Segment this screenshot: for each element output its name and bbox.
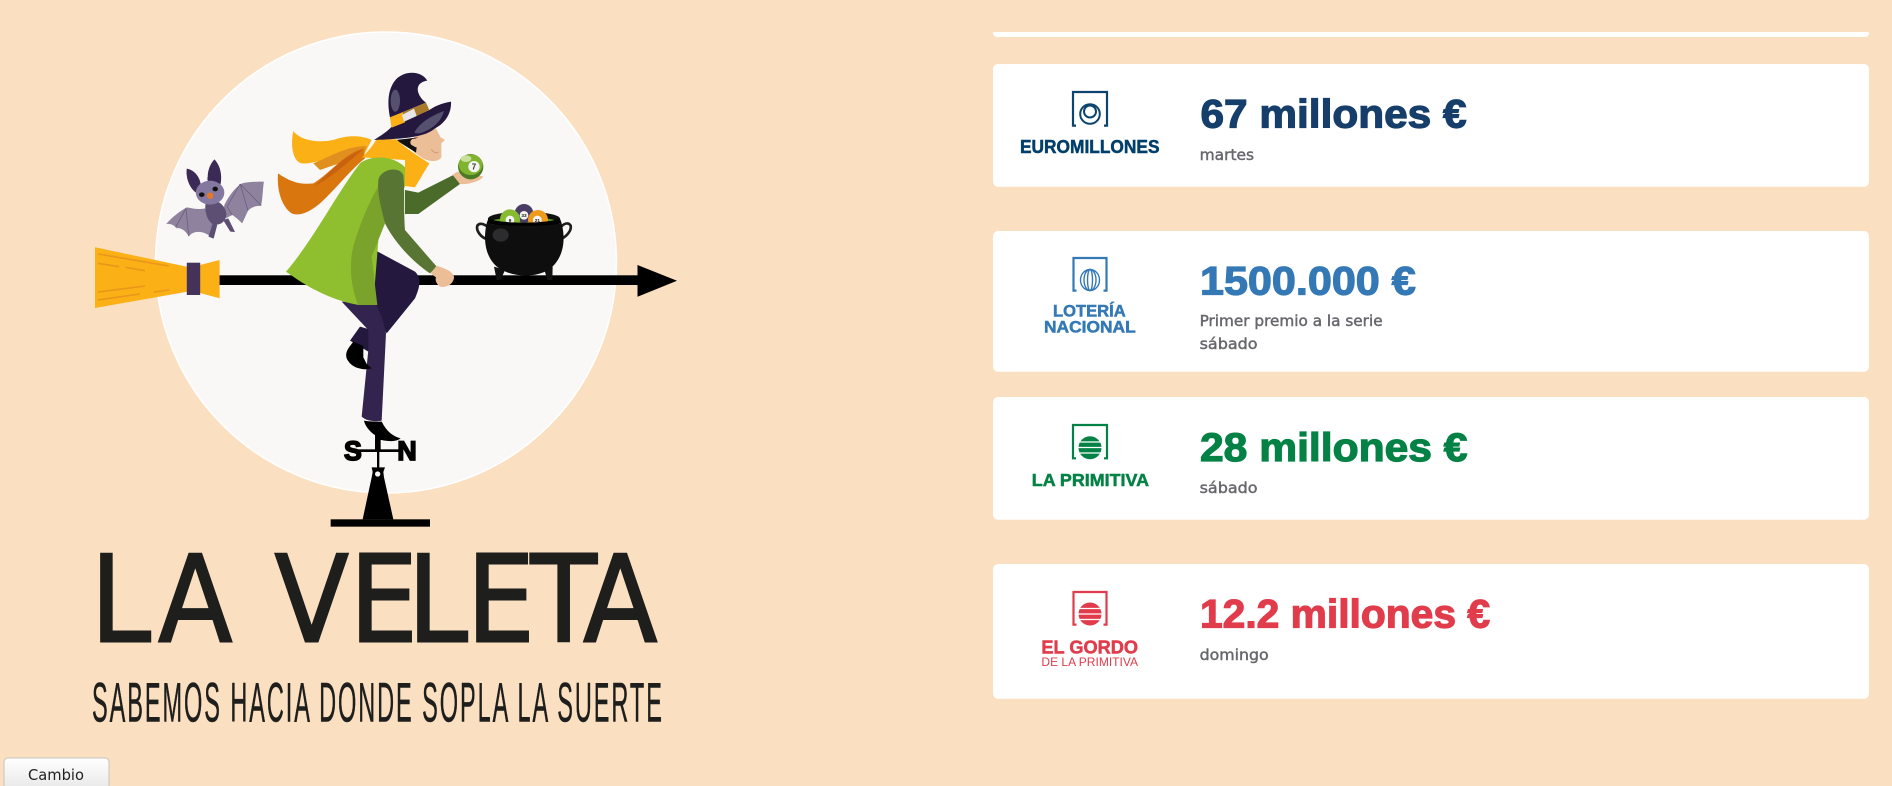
cauldron with balls: 33 <box>521 213 527 218</box>
title: LA VELETA <box>90 530 657 671</box>
broom handle arrow <box>219 265 677 297</box>
broom bristles <box>95 247 220 308</box>
moon circle <box>156 32 616 493</box>
logo: Lotería Nacional: NACIONAL <box>1044 319 1136 337</box>
hat <box>374 73 451 140</box>
witch legs and vane base: N <box>397 436 417 466</box>
cauldron with balls: 9 <box>509 218 512 223</box>
jackpot amount: 12.2 millones € <box>1200 592 1490 636</box>
panel: Euromillones <box>993 64 1869 187</box>
logo: Euromillones <box>1020 92 1160 157</box>
icon: bat <box>166 159 264 239</box>
witch legs and vane base: S <box>344 436 362 466</box>
logo: La Primitiva <box>1032 425 1149 490</box>
witch legs and vane base <box>331 248 430 527</box>
partial card at top <box>993 32 1869 37</box>
draw day: sábado <box>1200 479 1258 497</box>
jackpot amount: 28 millones € <box>1200 426 1468 470</box>
cauldron with balls: 21 <box>535 218 540 223</box>
button: Cambio: Cambio <box>28 766 84 784</box>
panel: Lotería Nacional <box>993 231 1869 372</box>
panel: La Primitiva <box>993 397 1869 520</box>
panel: El Gordo de la Primitiva <box>993 564 1869 699</box>
logo: El Gordo: EL GORDO <box>1041 637 1138 657</box>
logo: La Primitiva: LA PRIMITIVA <box>1032 470 1149 490</box>
lottery ball 7: 7 <box>472 163 477 172</box>
illustration: witch on weather vane <box>95 73 677 527</box>
jackpot amount: 67 millones € <box>1200 93 1466 137</box>
tagline: SABEMOS HACIA DONDE SOPLA LA SUERTE <box>92 672 662 734</box>
cauldron with balls <box>477 204 571 280</box>
lottery ball 7 <box>458 154 483 179</box>
prize note and draw day: Primer premio a la serie <box>1200 312 1383 330</box>
draw day: domingo <box>1200 646 1269 664</box>
logo: Euromillones: EUROMILLONES <box>1020 137 1160 157</box>
logo: El Gordo <box>1041 592 1138 669</box>
prize note and draw day <box>1200 312 1383 353</box>
draw day: martes <box>1200 146 1254 164</box>
button: Cambio <box>4 758 109 786</box>
witch upper body <box>278 73 571 305</box>
prize note and draw day: sábado <box>1200 335 1258 353</box>
logo: El Gordo: DE LA PRIMITIVA <box>1041 655 1138 669</box>
jackpot amount: 1500.000 € <box>1200 259 1416 303</box>
logo: Lotería Nacional: LOTERÍA <box>1053 302 1126 321</box>
logo: Lotería Nacional <box>1044 258 1136 337</box>
